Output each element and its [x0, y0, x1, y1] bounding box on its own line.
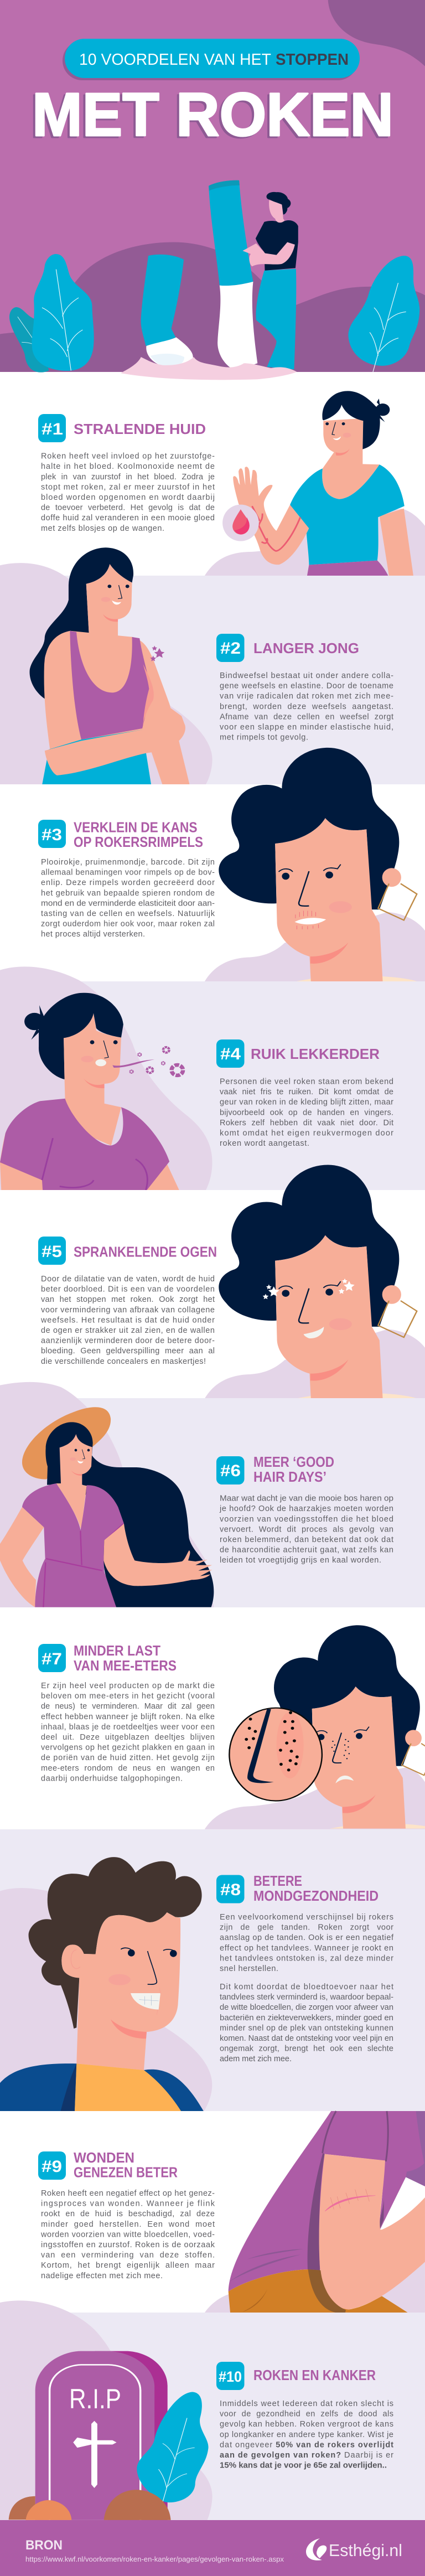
panel: section 4 ruik lekkerder: [0, 966, 425, 1192]
text block: beter doorbloed. Dit is een van de voordelen: [41, 1285, 215, 1294]
text block: bijvoorbeeld ook op de handen en vingers.: [220, 1108, 393, 1117]
text block: Maar wat dacht je van die mooie bos haren op: [220, 1494, 393, 1503]
hero shapes: [0, 0, 425, 373]
text block: voor een slappe en minder elastische huid,: [220, 723, 393, 732]
icon: number badge 6: #6: [220, 1462, 241, 1480]
icon: right leaf: [348, 256, 419, 372]
text block: de neus) te verminderen. Maar dit zal geen: [41, 1702, 215, 1711]
section background: [0, 1190, 425, 1398]
icon: standing cigarette: [209, 180, 257, 369]
heading: pill subtitle: [63, 39, 360, 80]
text block: nadelige effecten met zich mee.: [41, 2272, 163, 2280]
text block: ingsproces van wonden. Wanneer je flink: [41, 2200, 215, 2208]
text block: enlip. Deze rimpels worden gecreëerd door: [41, 878, 215, 887]
text block: rookt en de huid is beschadigd, zal deze: [41, 2210, 215, 2218]
icon: number badge 10: #10: [219, 2368, 242, 2385]
text block: [40, 2189, 215, 2280]
heading: WONDEN: [74, 2149, 134, 2166]
text block: [219, 1494, 393, 1565]
text block: voorzien van voedingsstoffen die het bloed: [220, 1515, 393, 1524]
illustration: arm with scar: [205, 2111, 425, 2313]
icon: number badge 4: [216, 1039, 245, 1068]
section background: [0, 1829, 425, 2111]
title: MET ROKEN: [32, 81, 393, 149]
text block: Kortom, het brengt eigenlijk alleen maar: [41, 2261, 215, 2270]
icon: scent stream and flowers: [112, 1047, 183, 1075]
illustration: face with wrinkles: [205, 748, 425, 981]
text block: mee-eters rondom de neus en wangen en: [41, 1764, 215, 1773]
text block: gevolg kan hebben. Roken vergroot de kans: [220, 2420, 393, 2429]
text block: Een veelvoorkomend verschijnsel bij rokers: [220, 1913, 393, 1922]
icon: number badge 4: #4: [220, 1045, 241, 1063]
text block: [220, 2399, 393, 2470]
text block: Inmiddels weet Iedereen dat roken slecht is: [220, 2399, 393, 2408]
text block: halte in het bloed. Koolmonoxide neemt de: [41, 462, 215, 471]
text block: effect op het tandvlees. Wanneer je rookt en: [220, 1944, 393, 1953]
heading: STRALENDE HUID: [74, 421, 206, 437]
icon: number badge 9: #9: [42, 2158, 62, 2176]
heading: SPRANKELENDE OGEN: [74, 1243, 217, 1260]
text block: de witte bloedcellen, die zorgen voor afweer van: [220, 2003, 393, 2012]
text block: roken wordt aangetast.: [220, 1139, 309, 1148]
text block: komt omdat het eigen reukvermogen door: [220, 1129, 393, 1138]
text block: aanslag op de tanden. Ook is er een negatief: [220, 1933, 394, 1942]
text block: minder goed herstellen. Een wond moet: [41, 2220, 215, 2229]
text block: aan de gevolgen van roken? Daarbij is er: [220, 2451, 393, 2460]
text block: Door de dilatatie van de vaten, wordt de huid: [41, 1275, 215, 1284]
heading: OP ROKERSRIMPELS: [74, 834, 203, 850]
illustration: woman smelling flowers: [0, 966, 212, 1192]
heading: [253, 1872, 379, 1904]
text block: Roken heeft veel invloed op het zuurstofge-: [41, 452, 215, 461]
text block: op longkanker en andere type kanker. Wist je: [220, 2430, 393, 2439]
icon: large left leaf: [32, 254, 94, 371]
logo: Esthegi: [306, 2538, 402, 2561]
illustration: woman with blood drop: [205, 391, 425, 576]
heading: ROKEN EN KANKER: [253, 2367, 376, 2383]
text block: Plooirokje, pruimenmondje, barcode. Dit zijn: [41, 858, 215, 867]
text block: het proces altijd versterken.: [41, 930, 145, 939]
icon: number badge 3: [38, 820, 66, 848]
text block: aanzienlijk verminderen door de betere door-: [41, 1337, 215, 1346]
text block: Roken heeft een negatief effect op het genez-: [41, 2189, 215, 2198]
text block: adem met zich mee.: [220, 2055, 292, 2063]
text block: bloed worden opgenomen en wordt daarbij: [41, 493, 215, 502]
text block: roken belemmerd, dan betekent dat ook dat: [220, 1535, 393, 1544]
icon: number badge 7: [38, 1644, 66, 1672]
text block: [220, 1913, 394, 2063]
text block: komen. Naast dat de ontsteking voor veel pijn en: [220, 2034, 393, 2043]
text block: deel uit. Deze uitgeblazen deeltjes blijven: [41, 1733, 215, 1742]
icon: man holding cigarette: [242, 192, 298, 369]
illustration: woman with hat and long hair: [0, 1382, 214, 1607]
text block: zorgt ouderdom hier ook voor, maar roken zal: [41, 920, 215, 929]
panel: section 8 mondgezondheid: [0, 1829, 425, 2112]
icon: magnifier circle: [229, 1708, 322, 1801]
icon: sparkle stars: [263, 1279, 355, 1299]
icon: number badge 2: [216, 634, 245, 662]
panel: hero: [0, 0, 425, 373]
text block: ongemak zorgt, brengt het ook een slechte: [220, 2045, 393, 2053]
icon: crushed cigarette: [141, 255, 193, 367]
heading: pill subtitle: 10 VOORDELEN VAN HET: [79, 51, 271, 69]
icon: number badge 1: [38, 414, 66, 442]
panel: section 2 langer jong: [0, 547, 425, 785]
text block: vervolgens op het gezicht plakken en gaan in: [41, 1744, 215, 1752]
panel: section 9 wonden: [0, 2111, 425, 2313]
heading: BETERE: [253, 1872, 302, 1889]
text block: [41, 1682, 215, 1783]
icon: number badge 7: #7: [42, 1650, 62, 1668]
text block: geur van roken in de kleding blijft zitten, maar: [220, 1098, 393, 1107]
source heading: BRON: [25, 2538, 63, 2553]
icon: number badge 9: [38, 2151, 66, 2180]
text block: de ogen er strakker uit zal zien, en de wallen: [41, 1326, 215, 1335]
text block: met zelfs blosjes op de wangen.: [41, 524, 164, 533]
section background: [0, 2313, 425, 2520]
text block: tandvlees sterk verminderd is, waardoor bepaal-: [220, 1993, 393, 2002]
text block: plek in van zuurstof in het bloed. Zodra je: [41, 473, 215, 482]
text block: van het stoppen met roken. Ook zorgt het: [41, 1295, 215, 1304]
text block: beloven om mee-eters in het gezicht (vooral: [41, 1692, 215, 1701]
text block: snel herstellen.: [220, 1964, 278, 1973]
section background: [0, 576, 425, 784]
text block: de poriën van de huid zitten. Het gevolg zijn: [41, 1753, 215, 1762]
icon: number badge 10: [216, 2362, 245, 2390]
text block: [41, 452, 215, 533]
text block: daarbij onderhuidse talgophopingen.: [41, 1774, 183, 1783]
heading: MONDGEZONDHEID: [253, 1887, 379, 1904]
text block: Afname van deze cellen en weefsel zorgt: [220, 712, 393, 721]
section background: [0, 1398, 425, 1607]
gravestone shapes: [0, 2300, 212, 2520]
text block: gene weefsels en elastine. Door de toename: [220, 682, 393, 691]
icon: small left leaf: [9, 307, 49, 373]
text block: worden voorzien van witte bloedcellen, voed-: [40, 2230, 215, 2239]
section background: [0, 2111, 425, 2313]
icon: number badge 1: #1: [42, 420, 63, 438]
heading: LANGER JONG: [253, 640, 359, 656]
text block: allemaal benamingen voor rimpels op de bov-: [41, 868, 215, 877]
text block: de toevoer verbeterd. Het gevolg is dat de: [41, 504, 215, 513]
section background: [0, 1607, 425, 1829]
text block: ingsstoffen en zuurstof. Roken is de oorzaak: [41, 2241, 215, 2249]
icon: number badge 5: #5: [42, 1243, 62, 1261]
icon: number badge 8: [216, 1875, 245, 1903]
text block: het gebruik van bepaalde spieren rondom de: [41, 889, 215, 898]
text block: van vrije radicalen dat roken met zich mee-: [220, 692, 393, 701]
heading: MEER ‘GOOD: [253, 1453, 334, 1470]
heading: [74, 2149, 178, 2181]
text block: [40, 1275, 215, 1366]
icon: number badge 5: [38, 1237, 66, 1265]
text block: 15% kans dat je voor je 65e zal overlijden..: [220, 2461, 387, 2470]
icon: number badge 6: [216, 1456, 245, 1484]
text block: tasting van de cellen en weefsels. Natuurlijk: [41, 909, 215, 918]
text block: die verschillende concealers en maskertjes!: [41, 1357, 206, 1366]
text block: vaak niet fris te ruiken. Dit komt omdat de: [220, 1088, 393, 1096]
text block: vervoert. Wordt dit proces als gevolg van: [220, 1525, 393, 1534]
text block: Personen die veel roken staan erom bekend: [220, 1077, 393, 1086]
panel: section 6 good hair days: [0, 1382, 425, 1607]
source url: https://www.kwf.nl/voorkomen/roken-en-kanker/pages/gevolgen-van-roken-.aspx: [25, 2555, 284, 2563]
text block: leiden tot vroegtijdig grijs en kaal worden.: [220, 1556, 381, 1565]
icon: number badge 8: #8: [220, 1881, 241, 1899]
text block: inhaal, blaas je de roetdeeltjes weer voor een: [41, 1722, 215, 1731]
text block: Rokers zelf hebben dit vaak niet door. Dit: [220, 1119, 393, 1127]
text block: bacteriën en ziekteverwekkers, minder goed en: [220, 2014, 393, 2022]
text block: weefsels. Het resultaat is dat de huid onder: [40, 1316, 215, 1325]
heading: pill subtitle: STOPPEN: [276, 51, 349, 69]
text block: doffe huid zal veranderen in een mooie gloed: [41, 514, 215, 523]
hero background: [0, 0, 425, 372]
text block: zijn de gele tanden. Roken zorgt voor: [220, 1923, 393, 1932]
panel: section 7 mee-eters: [0, 1607, 425, 1829]
heading: MINDER LAST: [74, 1642, 160, 1659]
illustration: woman touching arm: [0, 547, 212, 785]
text block: voor vermindering van afbraak van collagene: [41, 1306, 215, 1315]
footer background: [0, 2520, 425, 2576]
text block: [220, 1077, 393, 1148]
gravestone text: R.I.P: [69, 2383, 121, 2414]
panel: section 5 sprankelende ogen: [0, 1165, 425, 1399]
section background: [0, 981, 425, 1190]
text block: [41, 858, 215, 939]
text block: stopt met roken, zal er meer zuurstof in het: [41, 483, 215, 492]
text block: dat ongeveer 50% van de rokers overlijdt: [220, 2440, 393, 2449]
illustration: smiling man: [0, 1857, 212, 2112]
panel: section 1 stralende huid: [38, 391, 425, 576]
panel: section 3 rokersrimpels: [0, 748, 425, 981]
text block: mond en de verminderde elasticiteit door aan-: [41, 899, 215, 908]
heading: HAIR DAYS’: [253, 1468, 326, 1485]
text block: bloeding. Geen geldverspilling meer aan al: [41, 1347, 215, 1356]
illustration: face with blackheads: [205, 1625, 425, 1829]
heading: [74, 1642, 177, 1674]
heading: RUIK LEKKERDER: [251, 1046, 380, 1062]
text block: de haarconditie achteruit gaat, wat zelfs kan: [220, 1546, 393, 1555]
heading: GENEZEN BETER: [74, 2164, 178, 2181]
title: MET ROKEN: [30, 82, 391, 151]
icon: number badge 3: #3: [42, 826, 62, 844]
logo: Esthegi: Esthégi.nl: [329, 2541, 402, 2560]
text block: minder snel op de plek van ontsteking kunnen: [220, 2024, 393, 2032]
icon: number badge 2: #2: [220, 639, 241, 658]
icon: ash pile: [121, 357, 297, 380]
text block: brengt, worden deze weefsels aangetast.: [220, 702, 393, 711]
text block: effect hebben wanneer je blijft roken. Na elke: [41, 1713, 215, 1721]
text block: voor de gezondheid en zelfs de dood als: [220, 2410, 393, 2419]
heading: VERKLEIN DE KANS: [74, 819, 197, 836]
illustration: face with sparkling eyes: [205, 1165, 425, 1399]
heading: [74, 819, 203, 850]
text block: van een vermindering van deze stoffen.: [41, 2251, 215, 2260]
heading: VAN MEE-ETERS: [74, 1657, 177, 1674]
panel: footer: [0, 2520, 425, 2576]
text block: Dit komt doordat de bloedtoevoer naar het: [220, 1983, 393, 1992]
text block: het tandvlees ontstoken is, zal deze minder: [220, 1954, 393, 1963]
text block: je hoofd? Ook de haarzakjes moeten worden: [219, 1504, 393, 1513]
heading: [253, 1453, 334, 1485]
illustration: gravestone: [0, 2300, 212, 2520]
section background: [0, 784, 425, 981]
text block: met rimpels tot gevolg.: [220, 733, 308, 742]
text block: Er zijn heel veel producten op de markt die: [41, 1682, 215, 1690]
text block: [220, 671, 393, 742]
text block: Bindweefsel bestaat uit onder andere colla-: [220, 671, 393, 680]
panel: section 10 roken en kanker: [0, 2300, 425, 2520]
